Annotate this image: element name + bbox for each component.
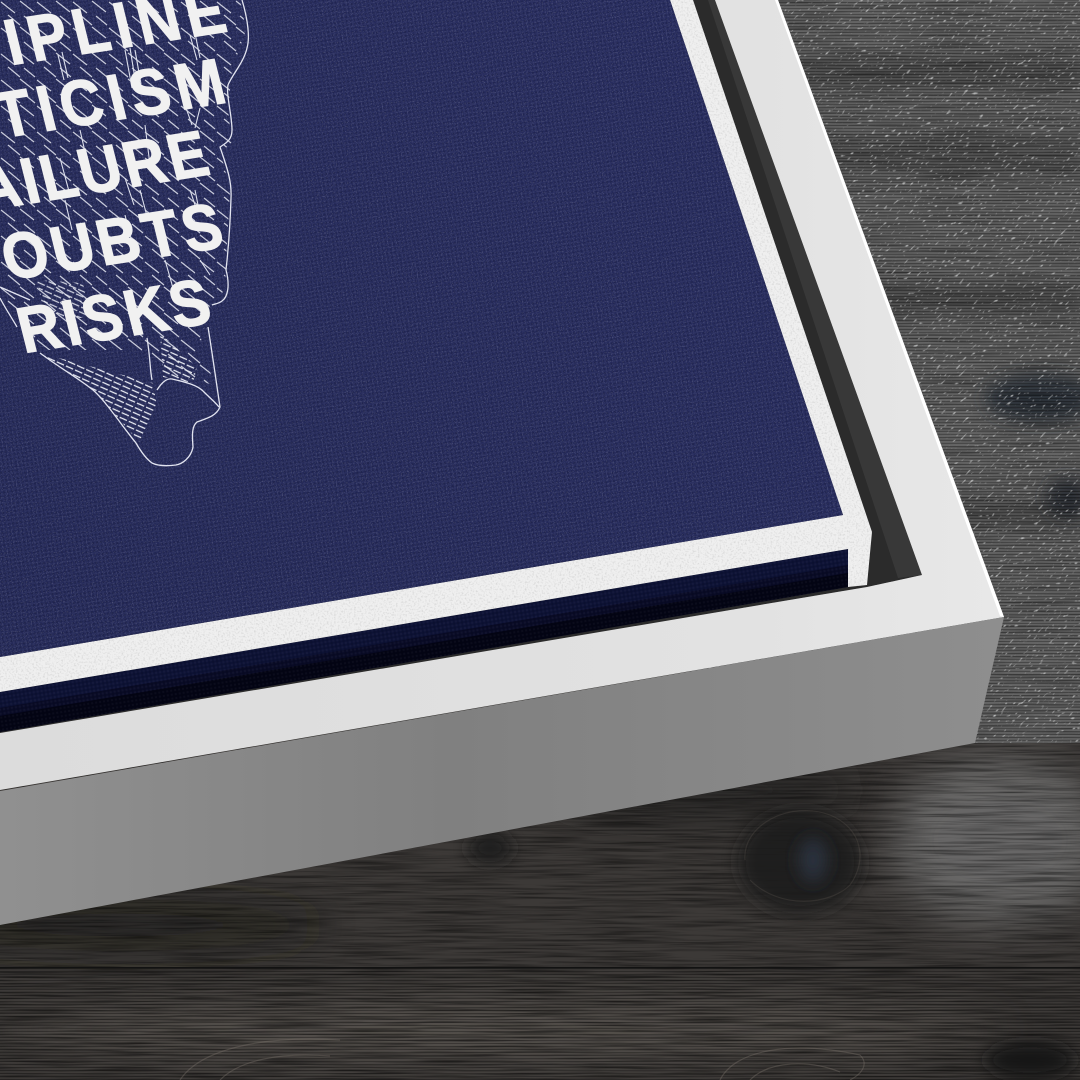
wooden table: lower planks [0, 740, 1080, 1080]
rock: vertical hatching [58, 33, 210, 295]
frame recess: lighter inner wall [708, 0, 922, 578]
rock: sparse hatching [0, 0, 250, 390]
canvas: white wrapped border [0, 0, 880, 700]
word: doubts: OUBTS [0, 190, 234, 294]
white frame: bright outer edge [775, 0, 1004, 617]
wood rings at the bottom [180, 1039, 864, 1080]
knot: large wood knot [738, 810, 862, 914]
canvas: wrapped side edge [0, 540, 860, 740]
canvas: navy face [0, 0, 850, 670]
illustration: hatched rock [0, 0, 250, 466]
word list on rock [0, 0, 239, 367]
wooden table: upper planks [690, 0, 1080, 743]
rock: contour line [0, 0, 248, 466]
word: risks: RISKS [10, 265, 221, 367]
frame recess: dark gap [0, 0, 922, 733]
knot: small wood knot [468, 833, 512, 863]
knot: bottom right knot [985, 1042, 1075, 1078]
rock: dense hatching [38, 280, 197, 442]
white frame: top face [0, 0, 1004, 790]
white frame: outer side face [0, 617, 1004, 925]
